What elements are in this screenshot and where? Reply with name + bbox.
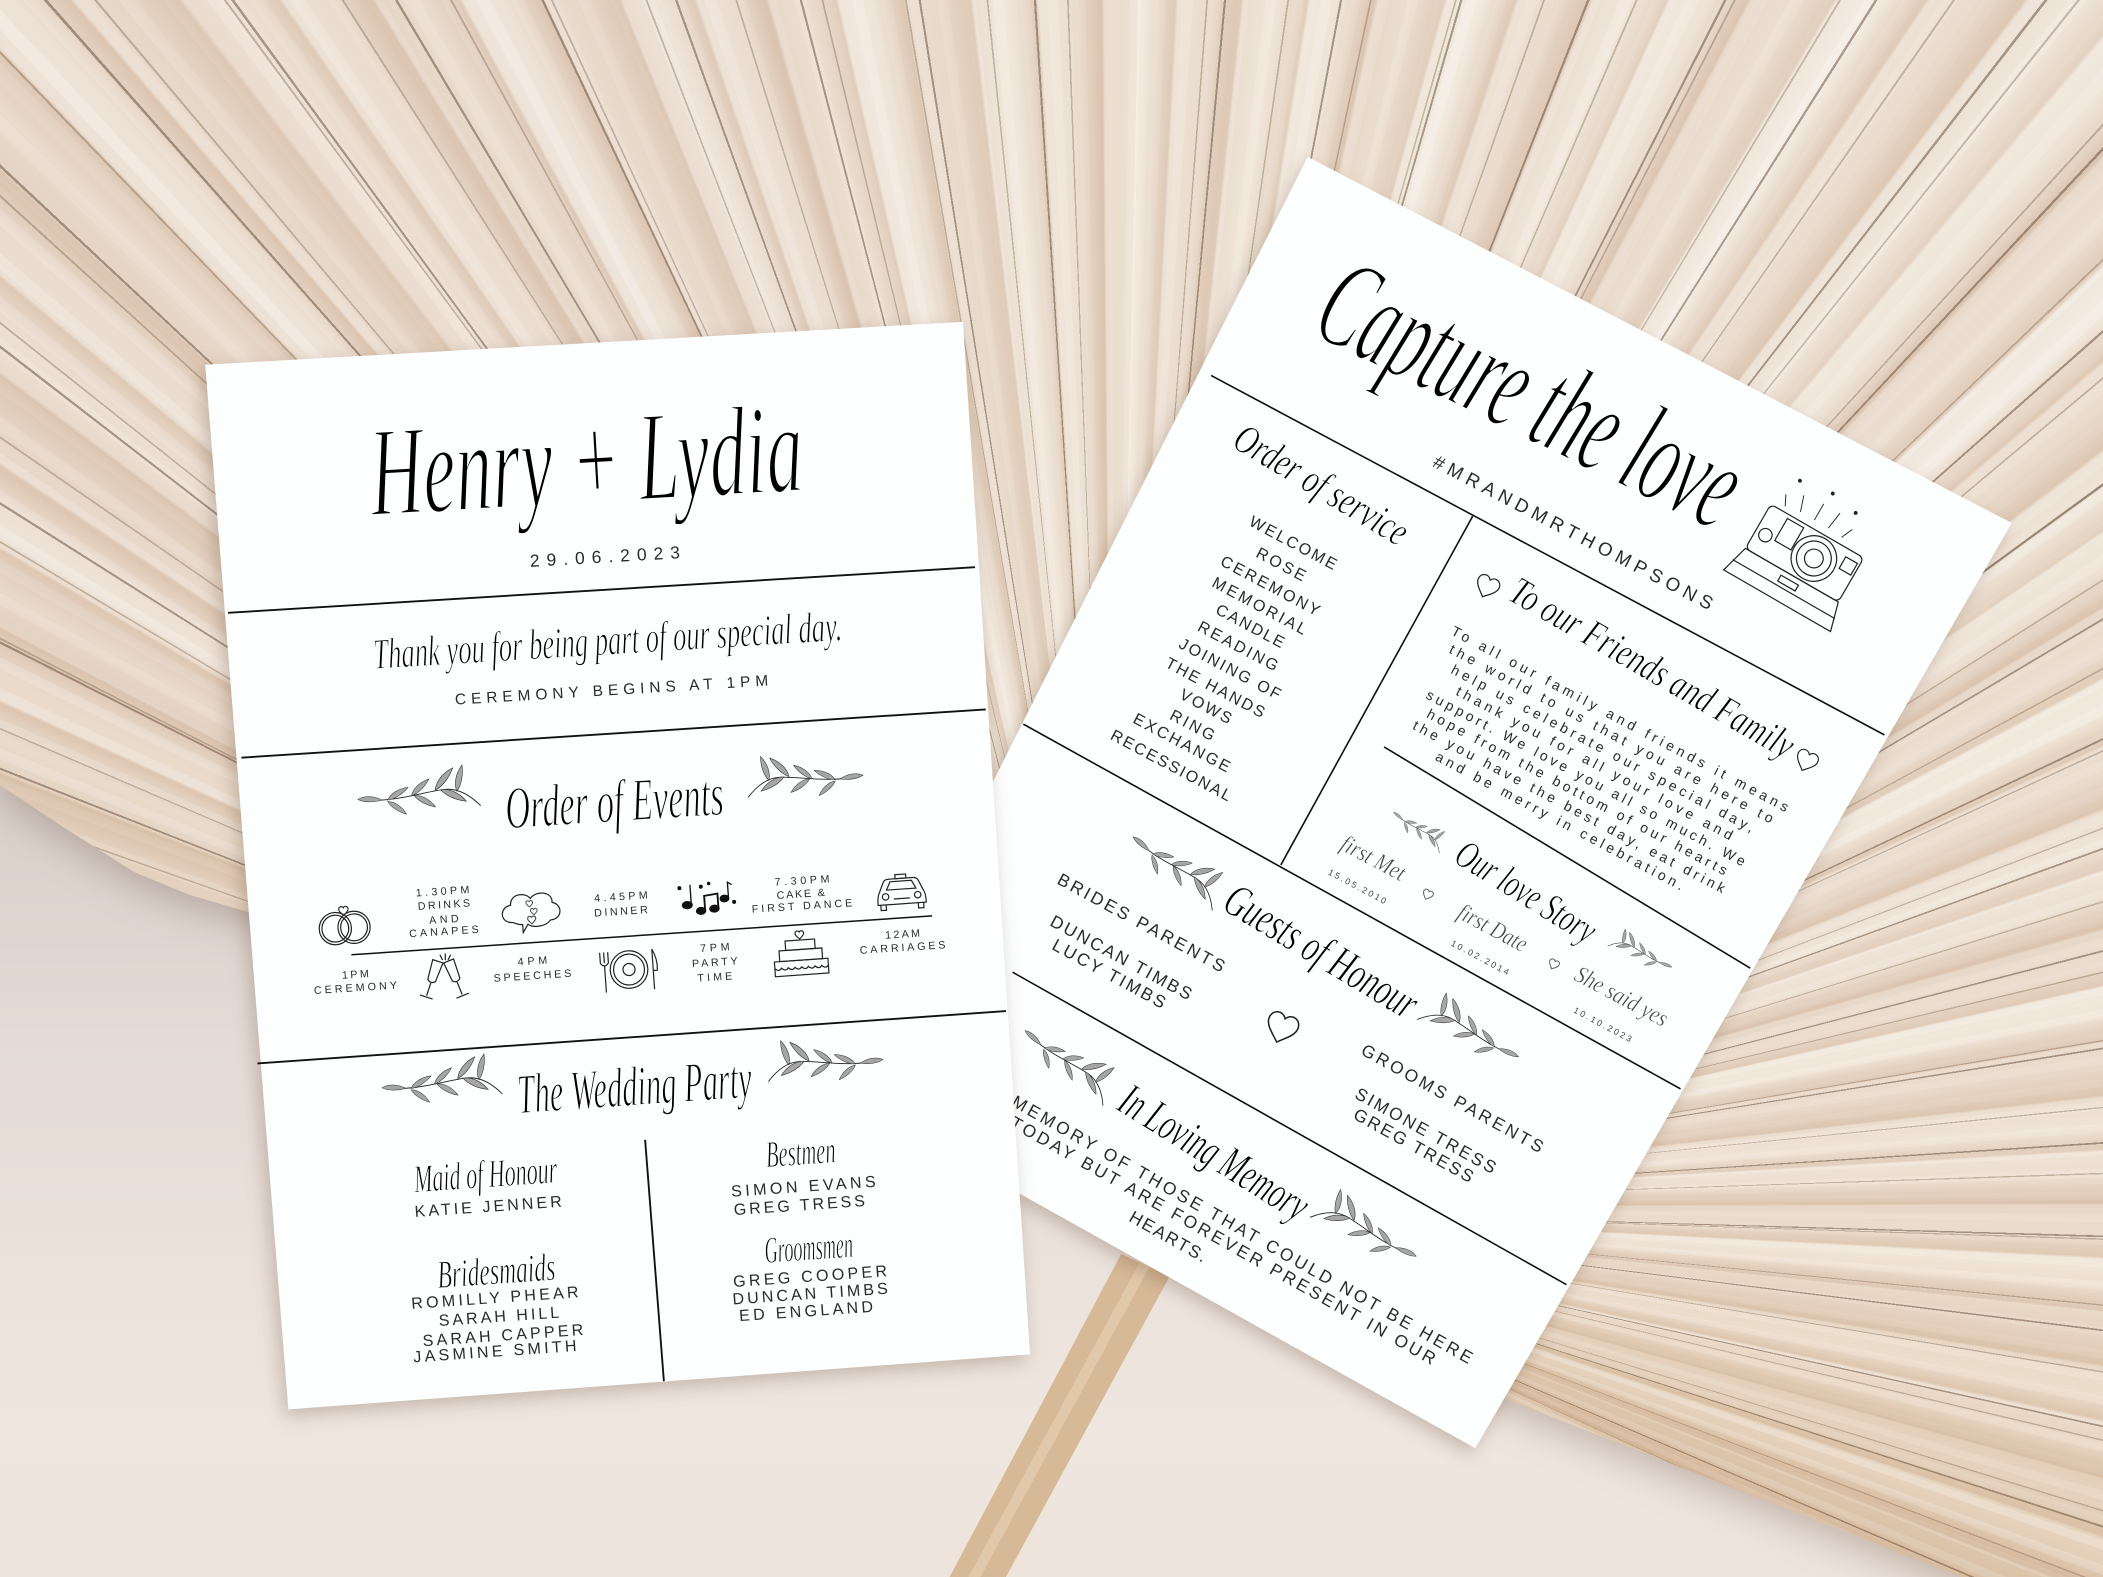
event: 1pm ceremony: CEREMONY [314,980,397,997]
date: 29.06.2023 [529,542,680,571]
role: groomsmen: DUNCAN TIMBS [732,1280,888,1308]
icon: heart [1792,747,1820,775]
milestone: first date: first Date [1453,898,1532,958]
service list [1107,512,1340,805]
event: 12am carriages: 12AM [885,928,920,942]
event: 7pm party time: PARTY [692,955,738,970]
role: bestmen: Bestmen [764,1130,837,1176]
icon: small heart [1421,888,1434,901]
thank-you line: Thank you for being part of our special day. [372,603,843,679]
leaf sprig [1014,1011,1126,1109]
rule [258,1011,1006,1063]
message paragraph: support. We love you all so much. We [1424,686,1749,869]
event: 1.30pm drinks: AND [429,913,459,927]
role: bestmen: SIMON EVANS [731,1173,876,1201]
service list: JOINING OF [1176,635,1284,704]
grooms parents: GROOMS PARENTS [1358,1040,1547,1157]
leaf sprig [1308,1182,1428,1272]
event: 1.30pm drinks [409,884,479,940]
icon: music notes [678,881,736,916]
service list: THE HANDS [1162,654,1268,722]
heading: Guests of Honour [1215,874,1428,1030]
icon: heart [1262,1009,1301,1047]
ceremony time: CEREMONY BEGINS AT 1PM [454,673,769,709]
role: maid of honour: Maid of Honour [412,1148,559,1202]
milestone: she said yes: 10.10.2023 [1572,1005,1634,1044]
message paragraph: thank you for all your love and [1454,683,1736,843]
role: bestmen [731,1130,876,1219]
role: bridesmaids: SARAH CAPPER [422,1321,584,1350]
panel: left card (Henry + Lydia) [205,322,1030,1409]
event: 1pm ceremony: 1PM [342,968,369,982]
role: bridesmaids: Bridesmaids [436,1245,557,1297]
heading: To our Friends and Family [1502,568,1803,768]
rule: under header [1211,375,1884,735]
title: Henry + Lydia [364,377,806,543]
grooms parents: SIMONE TRESS [1352,1083,1500,1178]
leaf sprig [1388,800,1452,855]
event: 4.45pm dinner [594,889,648,920]
message paragraph: and be merry in celebration. [1433,748,1687,893]
event: 12am carriages: CARRIAGES [859,939,946,957]
milestone: she said yes: She said yes [1570,961,1673,1032]
leaf sprig [745,749,864,802]
heading: Order of service [1225,415,1417,556]
memorial text: IN MEMORY OF THOSE THAT COULD NOT BE HERE [981,1076,1476,1368]
rule [228,567,975,613]
milestone: first met [1327,830,1411,906]
panel: order of events [314,749,946,999]
service list: ROSE [1253,544,1309,585]
brides parents: BRIDES PARENTS [1054,869,1229,976]
event: 7.30pm cake and first dance: 7.30PM [774,873,830,889]
event: 4pm speeches: SPEECHES [493,968,572,985]
role: bridesmaids: SARAH HILL [438,1304,560,1330]
event: 1.30pm drinks: CANAPES [409,924,479,940]
timeline rule [351,916,932,955]
brides parents: DUNCAN TIMBS [1047,911,1196,1004]
role: bridesmaids: JASMINE SMITH [413,1337,577,1366]
event: 4.45pm dinner: 4.45PM [594,889,648,905]
role: groomsmen [732,1225,888,1325]
heading: The Wedding Party [515,1046,754,1126]
column divider [645,1140,664,1381]
grooms parents: GREG TRESS [1350,1104,1477,1186]
icon: instant camera [1724,464,1892,632]
rule: guests top [1023,724,1681,1089]
leaf sprig [356,763,481,819]
brides parents: LUCY TIMBS [1049,935,1169,1012]
leaf sprig [1415,986,1530,1072]
event: 7pm party time: TIME [697,970,733,985]
icon: plate and cutlery [600,949,659,993]
service list: VOWS [1177,686,1235,728]
milestone: first met: first Met [1336,830,1411,887]
hashtag: #MRANDMRTHOMPSONS [1430,451,1717,614]
message paragraph: To all our family and friends it means [1449,623,1791,815]
role: maid of honour: KATIE JENNER [414,1193,562,1221]
event: 1.30pm drinks: DRINKS [417,897,470,913]
event: 7.30pm cake and first dance [751,873,853,916]
icon: wedding rings [318,905,371,946]
icon: champagne flutes [420,953,469,999]
rule [241,709,986,758]
milestone: first date [1449,898,1532,977]
message paragraph [1410,623,1791,897]
service list: READING [1195,618,1281,675]
role: groomsmen: GREG COOPER [733,1262,888,1291]
event: 7pm party time [692,941,738,985]
milestone: first date: 10.02.2014 [1449,938,1511,977]
leaf sprig [1607,925,1679,977]
event: 1.30pm drinks: 1.30PM [415,884,470,899]
panel: guests of honour [1047,817,1547,1186]
panel: right card (Capture the love) [837,157,2012,1448]
memorial text: TODAY BUT ARE FOREVER PRESENT IN OUR [1007,1112,1439,1369]
leaf sprig [380,1052,503,1107]
heading: Order of Events [503,762,726,842]
event: 7.30pm cake and first dance: FIRST DANCE [751,897,853,916]
icon: tiered cake [772,929,829,977]
message paragraph: help us celebrate our special day, [1449,661,1757,835]
rule: memory top [1013,972,1567,1285]
card sheet [837,157,2012,1448]
rule: love story top [1384,747,1750,968]
service list: CEREMONY [1217,552,1323,620]
icon: taxi car [876,873,927,911]
message paragraph: the you have the best day, eat drink [1410,717,1729,897]
role: bridesmaids [411,1245,584,1366]
panel: our love story [1327,800,1679,1044]
icon: speech cloud [501,892,561,934]
panel: the wedding party [380,1033,888,1381]
message paragraph: the world to us that you are here to [1447,641,1777,826]
leaf sprig [1123,817,1234,914]
role: groomsmen: Groomsmen [763,1225,854,1272]
service list: MEMORIAL [1209,574,1310,639]
event: 4.45pm dinner: DINNER [594,904,648,920]
panel: order of service [1107,415,1417,805]
fan handle stick [950,1254,1170,1577]
event: 4pm speeches: 4PM [517,955,548,968]
service list: RECESSIONAL [1107,726,1234,805]
icon: small heart [1547,958,1560,971]
event: 4pm speeches [493,955,572,985]
role: maid of honour [412,1148,562,1221]
icon: heart [1472,572,1502,602]
rule: column divider [1281,516,1473,865]
memorial text: HEARTS. [1126,1207,1210,1266]
event: 7pm party time: 7PM [700,941,730,955]
panel: in loving memory [981,1011,1476,1369]
event: 7.30pm cake and first dance: CAKE & [776,887,825,902]
service list: EXCHANGE [1130,710,1233,776]
service list: CANDLE [1213,601,1288,652]
panel: to our friends and family [1410,568,1820,897]
event: 1pm ceremony [314,968,397,997]
service list: RING [1167,706,1218,745]
milestone: first met: 15.05.2010 [1327,867,1388,906]
role: bridesmaids: ROMILLY PHEAR [411,1283,579,1313]
role: bestmen: GREG TRESS [733,1192,866,1219]
heading: In Loving Memory [1109,1074,1319,1232]
leaf sprig [766,1033,885,1086]
role: groomsmen: ED ENGLAND [739,1298,874,1325]
service list: WELCOME [1246,512,1340,574]
heading: Our love Story [1447,831,1606,953]
event: 12am carriages [859,928,946,957]
title: Capture the love [1296,229,1767,557]
message paragraph: hope from the bottom of our hearts [1424,705,1730,878]
card sheet [205,322,1030,1409]
